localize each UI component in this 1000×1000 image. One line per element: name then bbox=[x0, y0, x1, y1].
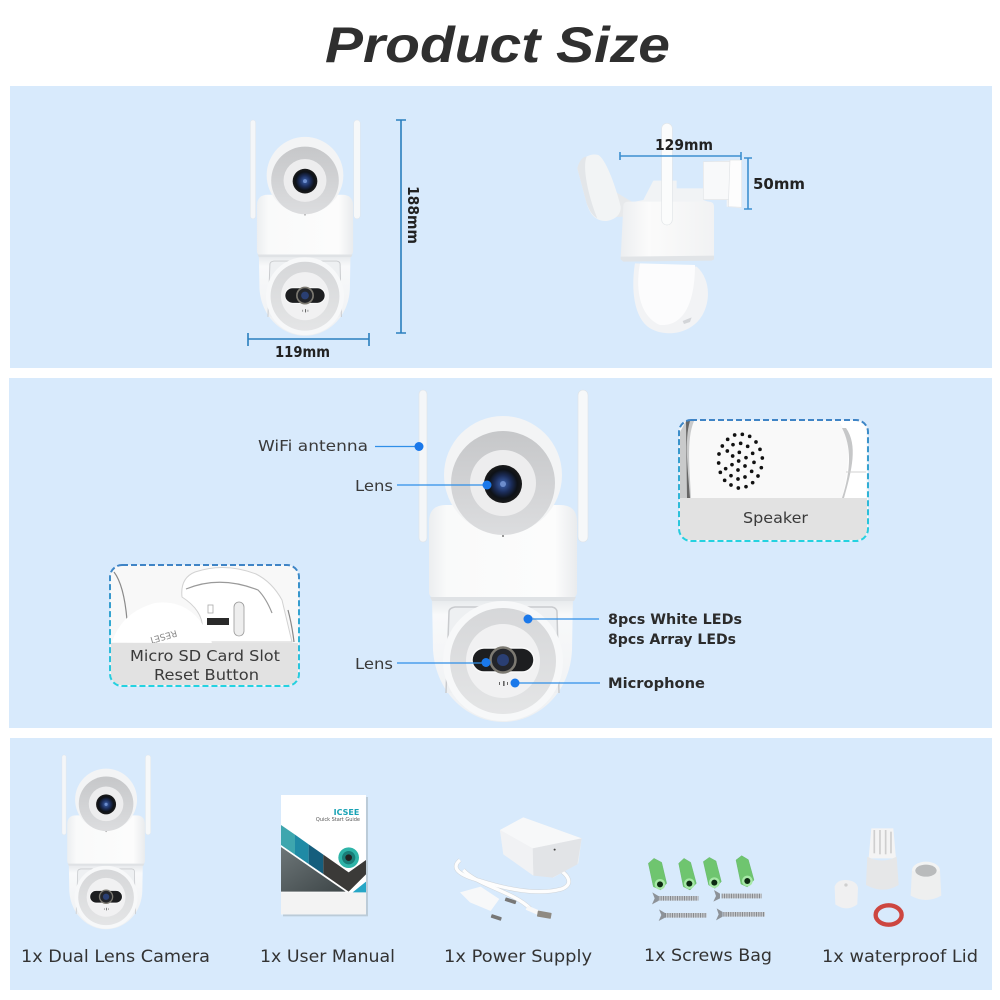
item: user manual: Quick Start Guide bbox=[316, 817, 360, 823]
item: power supply bbox=[456, 817, 582, 921]
front camera bbox=[250, 120, 360, 336]
side view camera bbox=[577, 123, 742, 333]
SD card inset: RESET bbox=[147, 627, 178, 645]
callout: top lens bbox=[355, 477, 492, 495]
main camera bbox=[419, 390, 588, 722]
callout: microphone: Microphone bbox=[608, 676, 705, 692]
item: dual lens camera bbox=[62, 755, 151, 929]
title: Product Size bbox=[325, 17, 670, 73]
callout: bottom lens: Lens bbox=[355, 655, 393, 673]
item: user manual: ICSEE bbox=[334, 808, 359, 817]
label: power supply: 1x Power Supply bbox=[444, 947, 592, 967]
callout: LEDs: 8pcs White LEDs bbox=[608, 612, 742, 628]
label: screws bag: 1x Screws Bag bbox=[644, 946, 772, 966]
panel: dimensions bbox=[10, 86, 992, 368]
height dimension 188mm: 188mm bbox=[404, 186, 422, 244]
panel: package contents bbox=[10, 738, 992, 990]
label: waterproof lid: 1x waterproof Lid bbox=[822, 947, 978, 967]
width dimension 129mm: 129mm bbox=[655, 136, 713, 154]
callout: microphone bbox=[510, 676, 705, 692]
callout: top lens: Lens bbox=[355, 477, 393, 495]
callout: WiFi antenna bbox=[258, 437, 424, 455]
callout: LEDs bbox=[524, 612, 742, 648]
SD card inset bbox=[110, 565, 299, 686]
speaker inset: Speaker bbox=[743, 509, 809, 527]
speaker inset bbox=[679, 420, 868, 541]
speaker holes bbox=[717, 432, 764, 490]
panel: parts bbox=[9, 378, 992, 728]
SD card inset: Reset Button bbox=[154, 666, 259, 684]
screws bbox=[658, 896, 765, 915]
height dimension 188mm bbox=[396, 120, 422, 333]
depth dimension 50mm bbox=[744, 158, 805, 209]
width dimension 119mm bbox=[248, 333, 369, 361]
label: dual lens camera: 1x Dual Lens Camera bbox=[21, 947, 210, 967]
item: user manual bbox=[281, 795, 368, 916]
label: user manual: 1x User Manual bbox=[260, 947, 395, 967]
width dimension 119mm: 119mm bbox=[275, 343, 330, 361]
item: waterproof lid bbox=[835, 828, 941, 925]
callout: WiFi antenna: WiFi antenna bbox=[258, 437, 368, 455]
callout: bottom lens bbox=[355, 655, 490, 673]
width dimension 129mm bbox=[620, 136, 741, 160]
item: screws bag bbox=[648, 856, 765, 921]
SD card inset: Micro SD Card Slot bbox=[130, 647, 280, 665]
callout: LEDs: 8pcs Array LEDs bbox=[608, 632, 736, 648]
wall plugs bbox=[648, 856, 754, 890]
depth dimension 50mm: 50mm bbox=[753, 175, 805, 193]
